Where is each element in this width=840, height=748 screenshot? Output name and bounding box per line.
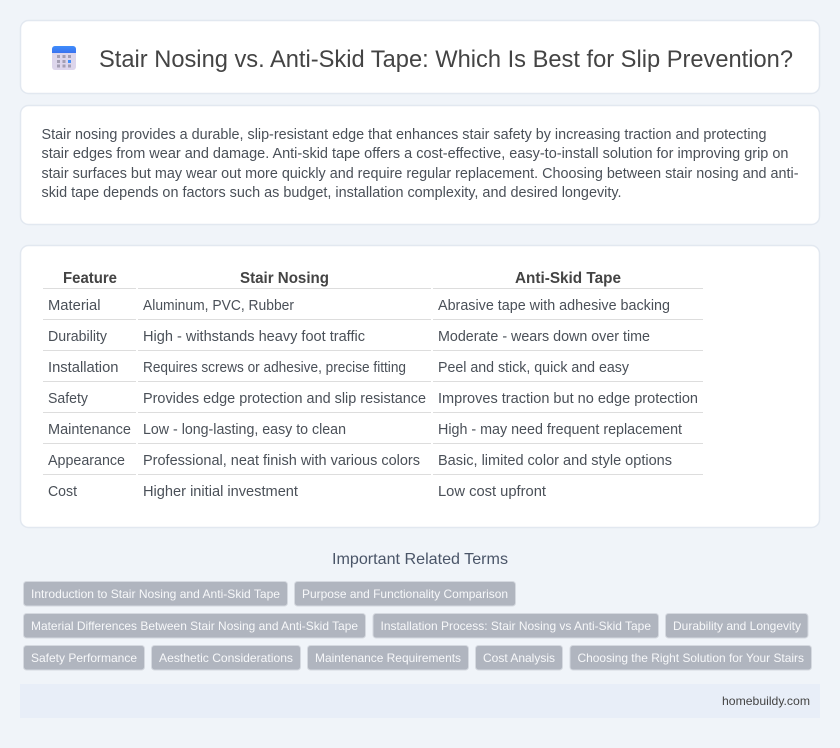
row: safety: Provides edge protection and slip resistance <box>143 391 426 407</box>
tag <box>373 614 658 638</box>
row: material: Material <box>48 298 100 314</box>
text block: introduction: stair surfaces but may wear out more quickly and require regular replacement. Choosing between stair nosing and anti- <box>42 166 799 182</box>
row: safety: Safety <box>48 391 89 407</box>
row: appearance: Appearance <box>48 453 125 469</box>
row: cost: Low cost upfront <box>438 484 546 500</box>
tag: Safety Performance <box>31 651 137 665</box>
row: installation: Installation <box>48 360 118 376</box>
row: appearance: Professional, neat finish with various colors <box>143 453 420 469</box>
tag: Maintenance Requirements <box>315 651 461 665</box>
tag: Choosing the Right Solution for Your Stairs <box>578 651 804 665</box>
footer: site name: homebuildy.com <box>722 694 810 708</box>
tag <box>24 582 288 606</box>
tag: Aesthetic Considerations <box>159 651 293 665</box>
text block: introduction: stair edges from wear and damage. Anti-skid tape offers a cost-effective, easy-to-install solution for improving grip on <box>42 146 788 162</box>
text block: introduction <box>42 127 799 201</box>
row: maintenance: Low - long-lasting, easy to clean <box>143 422 346 438</box>
tag: Installation Process: Stair Nosing vs Anti-Skid Tape <box>380 619 651 633</box>
tag: Durability and Longevity <box>673 619 801 633</box>
row: material <box>48 298 670 314</box>
icon: calendar <box>52 46 76 70</box>
row: cost: Cost <box>48 484 77 500</box>
row: maintenance: High - may need frequent replacement <box>438 422 682 438</box>
table header: Feature <box>63 270 117 287</box>
row: maintenance: Maintenance <box>48 422 131 438</box>
table header <box>63 270 621 287</box>
row: installation: Requires screws or adhesive, precise fitting <box>143 360 406 376</box>
table header: Anti-Skid Tape <box>515 270 621 287</box>
row: installation <box>48 360 630 376</box>
text block: introduction: Stair nosing provides a durable, slip-resistant edge that enhances stair safety by increasing traction and protecting <box>42 127 766 143</box>
related term tags <box>24 582 812 670</box>
title: Stair Nosing vs. Anti-Skid Tape: Which Is Best for Slip Prevention? <box>99 46 793 73</box>
row: material: Abrasive tape with adhesive backing <box>438 298 670 314</box>
row: durability: Durability <box>48 329 108 345</box>
table header: Stair Nosing <box>240 270 329 287</box>
text block: introduction: skid tape depends on factors such as budget, installation complexity, and desired longevity. <box>42 185 622 201</box>
tag <box>24 614 366 638</box>
row: appearance: Basic, limited color and style options <box>438 453 672 469</box>
row: safety <box>48 391 698 407</box>
tag: Material Differences Between Stair Nosing and Anti-Skid Tape <box>31 619 358 633</box>
tag <box>152 646 300 670</box>
tag <box>294 582 516 606</box>
panel: introduction <box>20 106 820 224</box>
row: material: Aluminum, PVC, Rubber <box>143 298 294 314</box>
row: installation: Peel and stick, quick and easy <box>438 360 630 376</box>
footer <box>20 684 820 718</box>
heading: related terms: Important Related Terms <box>332 551 508 568</box>
tag <box>666 614 808 638</box>
tag: Purpose and Functionality Comparison <box>302 587 508 601</box>
row: durability: High - withstands heavy foot traffic <box>143 329 365 345</box>
row: durability <box>48 329 650 345</box>
row: safety: Improves traction but no edge protection <box>438 391 698 407</box>
tag <box>24 646 144 670</box>
row: cost: Higher initial investment <box>143 484 298 500</box>
row: durability: Moderate - wears down over time <box>438 329 650 345</box>
tag <box>570 646 812 670</box>
row: appearance <box>48 453 672 469</box>
row: cost <box>48 484 546 500</box>
tag: Cost Analysis <box>483 651 555 665</box>
panel: comparison table <box>20 246 820 528</box>
row: maintenance <box>48 422 682 438</box>
tag: Introduction to Stair Nosing and Anti-Skid Tape <box>31 587 280 601</box>
tag <box>476 646 562 670</box>
tag <box>308 646 468 670</box>
panel: header <box>20 20 820 94</box>
